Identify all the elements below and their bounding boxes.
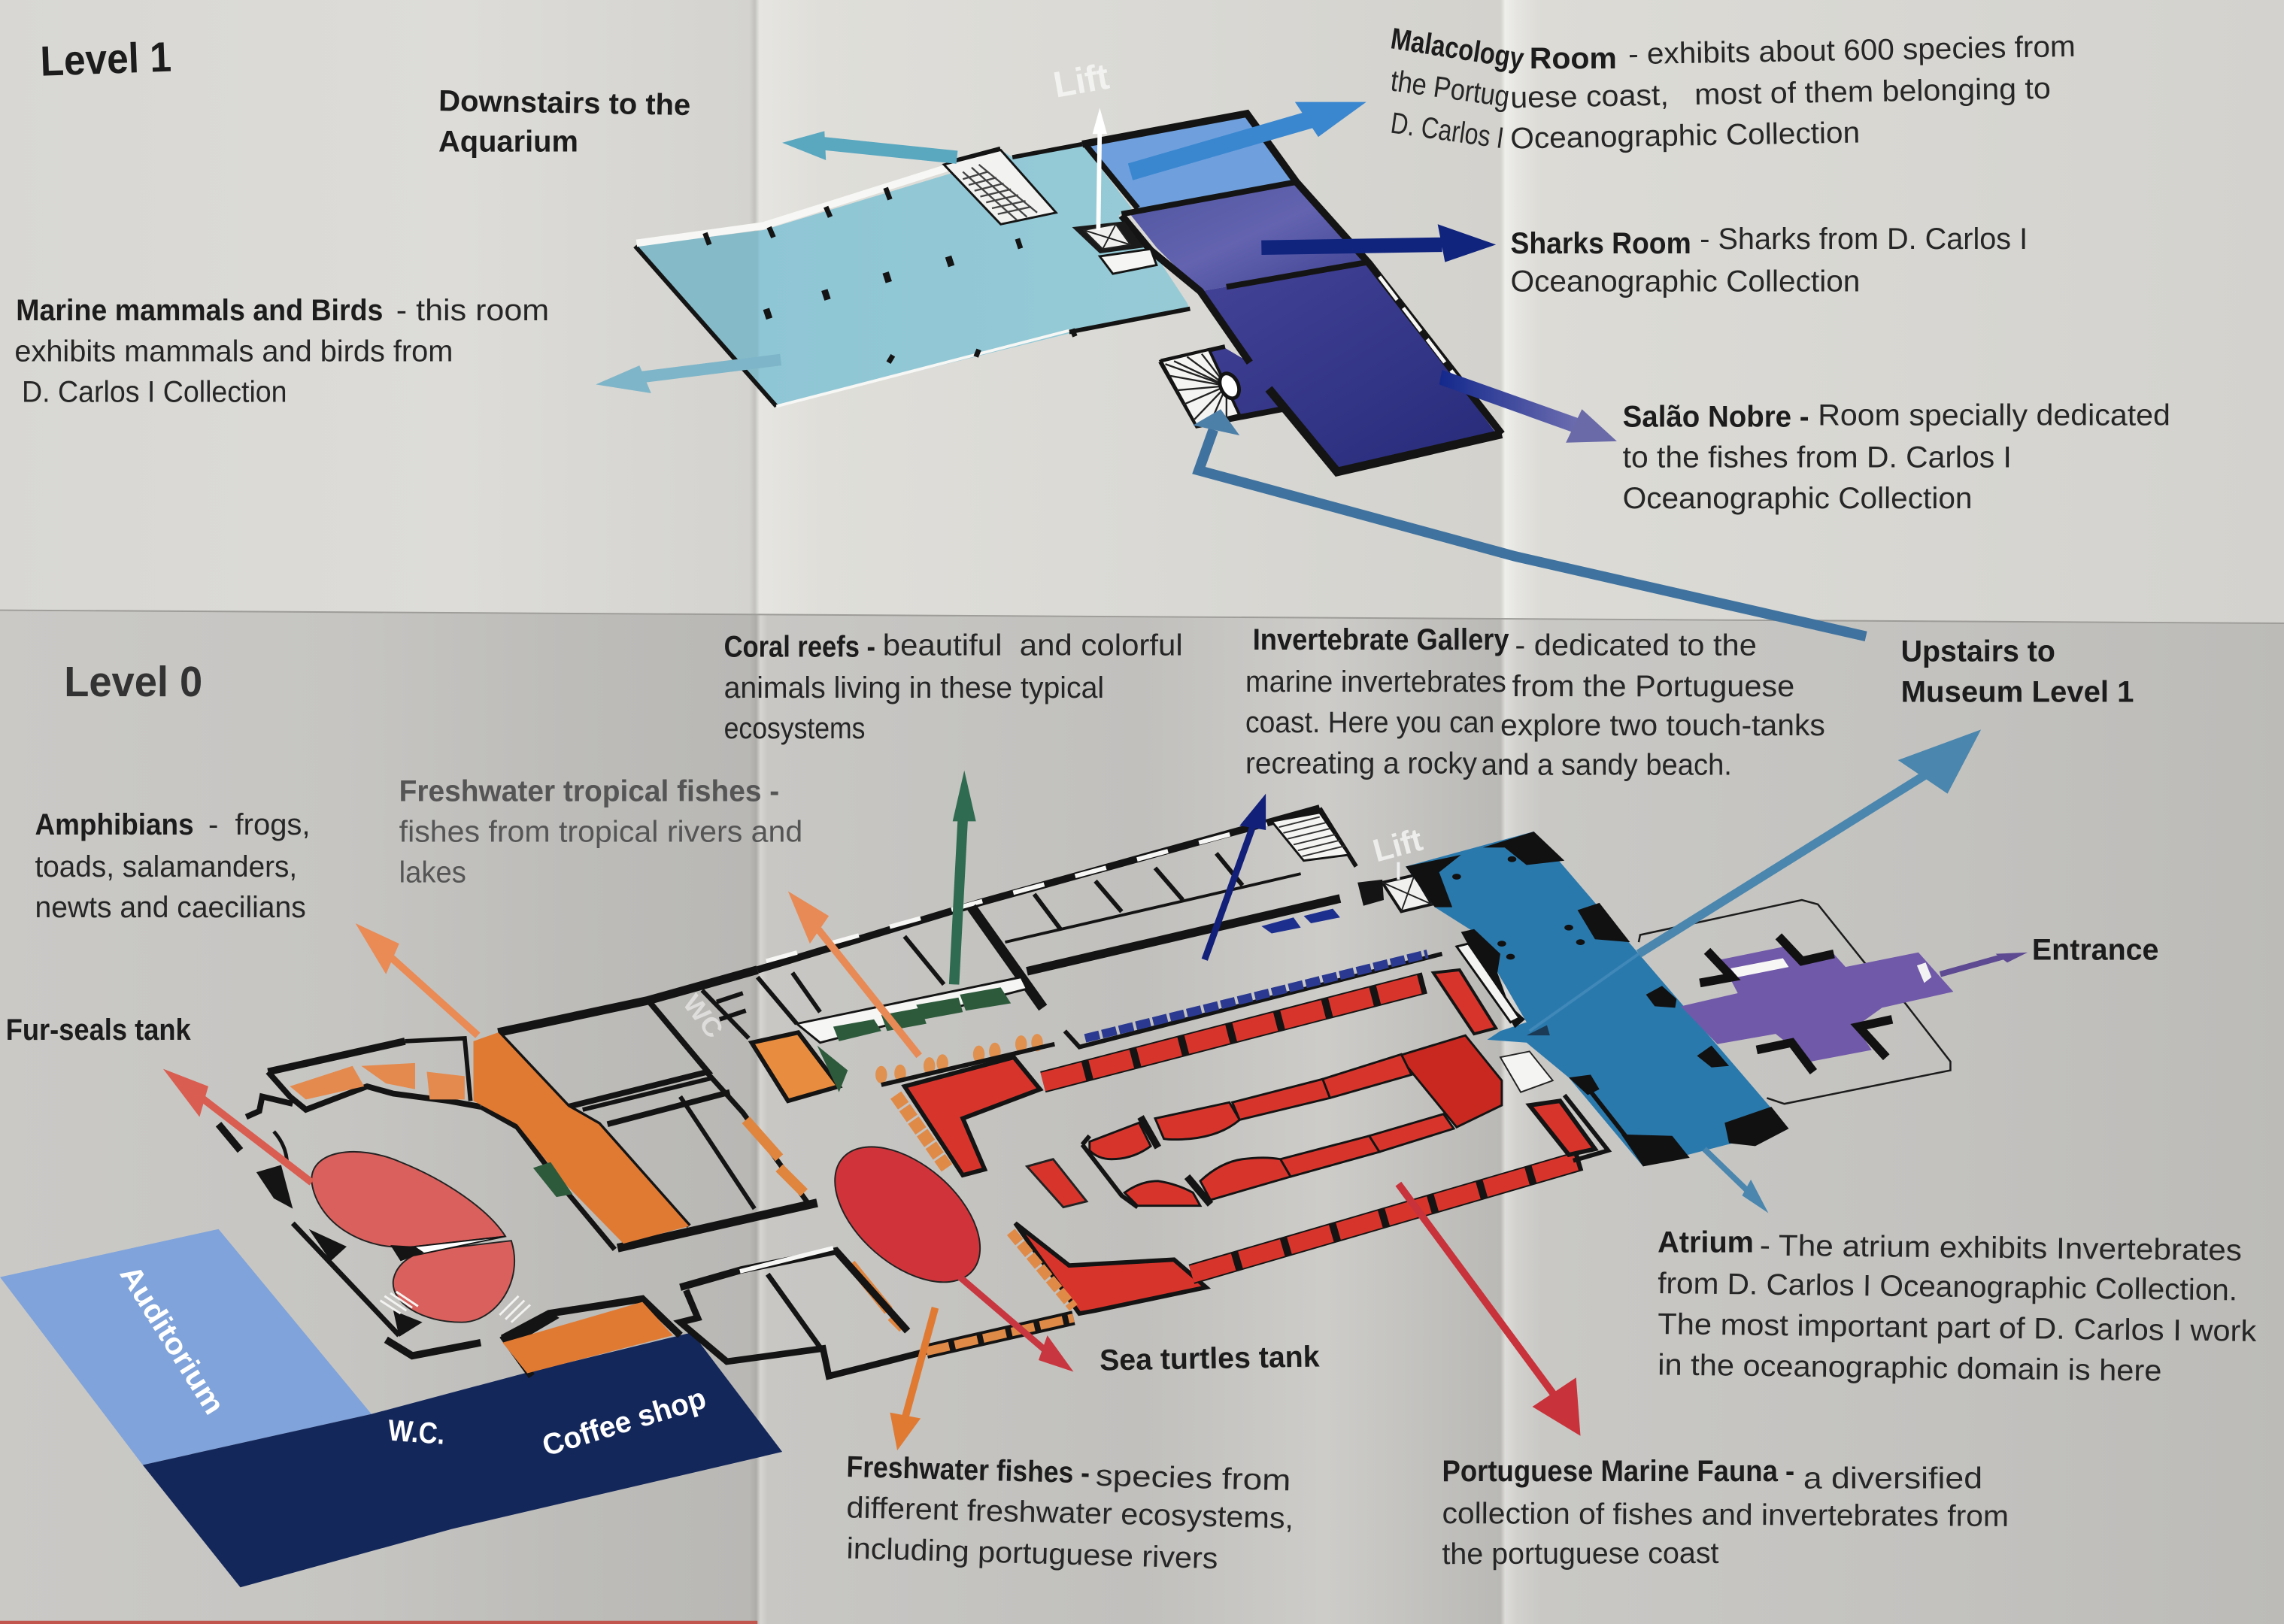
block: wc and coffee shop — [143, 1332, 782, 1587]
text: malacology room: the Portug — [1389, 64, 1512, 114]
level 1 floor plan — [635, 114, 1502, 472]
text: upstairs to museum level 1: Museum Level 1 — [1901, 676, 2134, 709]
text: downstairs to the aquarium: Aquarium — [438, 125, 578, 158]
text: atrium: Atrium — [1658, 1226, 1754, 1259]
fur seal tank bottom — [393, 1241, 514, 1323]
red isolated case — [1027, 1159, 1087, 1207]
red central block — [1398, 1035, 1502, 1127]
text: coral reefs: ecosystems — [724, 712, 865, 745]
orange rooms — [290, 1032, 839, 1373]
fur seal tank top — [311, 1152, 505, 1247]
WC block — [677, 970, 751, 1044]
text: malacology room: D. Carlos I — [1389, 107, 1506, 155]
arrow: salao nobre — [1439, 370, 1617, 443]
text: marine mammals and birds: exhibits mammals and birds from — [14, 335, 453, 368]
text: freshwater fishes: different freshwater ecosystems, — [846, 1491, 1294, 1535]
text: malacology room: Malacology — [1388, 22, 1526, 76]
tank stairs — [381, 1292, 530, 1323]
invertebrate gallery strip — [1065, 954, 1442, 1047]
text: coral reefs: animals living in these typical — [724, 671, 1104, 704]
block: auditorium — [0, 1229, 372, 1465]
text: amphibians: - frogs, — [208, 808, 311, 841]
windows — [636, 168, 1464, 406]
lift shaft — [1072, 221, 1157, 274]
text: sea turtles tank: Sea turtles tank — [1100, 1340, 1321, 1377]
text: marine mammals and birds: - this room — [396, 294, 549, 327]
text: entrance: Entrance — [2032, 933, 2158, 966]
text: fur-seals tank: Fur-seals tank — [6, 1013, 192, 1047]
text: downstairs to the aquarium — [438, 84, 691, 158]
west wing structure — [219, 970, 817, 1376]
green strip — [833, 987, 1011, 1041]
arrow: upstairs to level 1 — [1193, 409, 1866, 636]
text: upstairs to museum level 1: Upstairs to — [1901, 635, 2055, 668]
arrow: atrium — [1704, 1149, 1768, 1213]
arrow: amphibians — [356, 923, 478, 1035]
red section west — [905, 1057, 1040, 1175]
arrow: freshwater fishes — [890, 1307, 935, 1450]
text: invertebrate gallery: and a sandy beach. — [1482, 748, 1732, 781]
orange bumps — [875, 1034, 1054, 1085]
room: sharks — [1129, 182, 1368, 291]
text: freshwater tropical fishes: Freshwater tropical fishes - — [399, 774, 779, 807]
text: portuguese marine fauna: collection of fishes and invertebrates from — [1442, 1497, 2009, 1533]
block: auditorium: Auditorium — [114, 1259, 231, 1420]
lift level 0 — [1357, 862, 1432, 911]
text: freshwater fishes: including portuguese rivers — [846, 1532, 1218, 1575]
room: marine mammals and birds — [635, 144, 1190, 406]
text: salao nobre: Oceanographic Collection — [1623, 482, 1973, 515]
red block south east — [1530, 1095, 1608, 1161]
text: portuguese marine fauna: Portuguese Marine Fauna - — [1442, 1455, 1794, 1488]
entrance hall — [1639, 900, 1953, 1104]
blue wall cases — [1261, 909, 1340, 934]
text: portuguese marine fauna: the portuguese coast — [1442, 1537, 1719, 1571]
red gallery south row — [1191, 1161, 1580, 1274]
block: wc and coffee shop: Coffee shop — [538, 1382, 710, 1462]
block: wc and coffee shop: W.C. — [387, 1414, 446, 1451]
text: freshwater tropical fishes — [399, 774, 802, 889]
arrow: tropical freshwater fishes — [788, 891, 919, 1056]
text: salao nobre — [1623, 399, 2170, 515]
arrow: sharks — [1261, 224, 1496, 262]
text: invertebrate gallery — [1245, 623, 1825, 781]
text: coral reefs — [724, 629, 1183, 745]
text: atrium — [1658, 1226, 2257, 1388]
text: marine mammals and birds: D. Carlos I Collection — [22, 376, 287, 409]
WC block: WC — [677, 989, 729, 1044]
tank wedges — [256, 1165, 560, 1347]
text: sharks room: Oceanographic Collection — [1511, 265, 1860, 298]
text: malacology room — [1388, 22, 2076, 156]
arrow: sea turtles — [960, 1277, 1073, 1372]
text: portuguese marine fauna: a diversified — [1803, 1462, 1982, 1495]
arrow: upstairs — [1527, 729, 1981, 1035]
red block east — [1433, 970, 1496, 1034]
arrow: malacology — [1130, 102, 1366, 172]
text: invertebrate gallery: recreating a rocky — [1245, 747, 1477, 780]
text: malacology room: Room — [1530, 42, 1617, 75]
atrium — [1406, 832, 1788, 1166]
text: invertebrate gallery: Invertebrate Gallery — [1253, 623, 1509, 656]
text: freshwater fishes: species from — [1095, 1459, 1291, 1497]
text: upstairs to museum level 1 — [1901, 635, 2134, 709]
text: amphibians: newts and caecilians — [35, 891, 306, 924]
text: salao nobre: Room specially dedicated — [1818, 399, 2170, 432]
text: atrium: from D. Carlos I Oceanographic Collection. — [1658, 1267, 2237, 1307]
red south block — [1011, 1223, 1206, 1313]
text: sharks room: Sharks Room — [1511, 227, 1691, 260]
text: invertebrate gallery: from the Portuguese — [1512, 670, 1794, 703]
arrow: entrance — [1940, 953, 2028, 974]
staircase to aquarium — [944, 150, 1056, 224]
text: atrium: in the oceanographic domain is here — [1658, 1348, 2162, 1388]
heading: Level 0: Level 0 — [64, 658, 202, 705]
text: freshwater tropical fishes: lakes — [399, 856, 466, 889]
text: freshwater fishes — [846, 1450, 1294, 1575]
north wall — [757, 808, 1320, 970]
arrow: to aquarium — [782, 131, 957, 160]
room: salao nobre — [1161, 262, 1499, 472]
text: malacology room: - exhibits about 600 species from — [1628, 30, 2076, 71]
text: invertebrate gallery: - dedicated to the — [1515, 629, 1757, 662]
text: invertebrate gallery: explore two touch-tanks — [1500, 709, 1825, 742]
tank divider — [415, 1236, 505, 1256]
south rooms — [681, 1251, 927, 1376]
arrow: marine mammals — [596, 359, 781, 393]
north rooms walls — [757, 808, 1356, 1024]
atrium side stairs — [1500, 1051, 1553, 1092]
sea turtle tank — [810, 1121, 1005, 1308]
text: malacology room: uese coast, most of them belonging to — [1510, 72, 2051, 114]
text: atrium: The most important part of D. Carlos I work — [1658, 1307, 2257, 1348]
arrow: coral reefs — [953, 771, 976, 984]
text: amphibians: toads, salamanders, — [35, 850, 297, 883]
text: portuguese marine fauna — [1442, 1455, 2009, 1571]
heading: Level 1: Level 1 — [39, 33, 172, 85]
arrow: fur seals — [163, 1069, 311, 1183]
text: marine mammals and birds: Marine mammals and Birds — [16, 294, 383, 327]
arrow: lift level 1 — [1093, 108, 1107, 230]
red gallery north row — [1043, 983, 1424, 1082]
text: amphibians: Amphibians — [35, 808, 194, 841]
inner dividers — [1082, 1117, 1211, 1207]
text: invertebrate gallery: coast. Here you can — [1245, 706, 1494, 739]
north stairs — [1272, 813, 1349, 861]
orange strips — [746, 1120, 903, 1328]
arrow: portuguese marine fauna — [1398, 1184, 1580, 1436]
level 0 floor plan — [219, 808, 1953, 1376]
text: coral reefs: beautiful and colorful — [883, 629, 1183, 662]
white corridor — [796, 977, 1027, 1043]
green niches — [533, 1046, 848, 1197]
text: coral reefs: Coral reefs - — [724, 631, 875, 664]
room: malacology — [1085, 114, 1297, 208]
text: sharks room — [1511, 223, 2028, 298]
text: salao nobre: to the fishes from D. Carlos I — [1623, 441, 2012, 474]
label: Lift level 0: Lift — [1369, 822, 1427, 869]
text: amphibians — [35, 808, 311, 924]
window strip south — [740, 1248, 833, 1271]
text: invertebrate gallery: marine invertebrates — [1245, 665, 1506, 698]
columns — [763, 238, 1023, 320]
text: downstairs to the aquarium: Downstairs to the — [438, 84, 691, 122]
label: Lift level 1: Lift — [1051, 56, 1112, 106]
text: salao nobre: Salão Nobre - — [1623, 401, 1809, 434]
orange tiles — [896, 1095, 947, 1168]
level 1 walls — [635, 114, 1502, 472]
text: sharks room: - Sharks from D. Carlos I — [1700, 223, 2028, 256]
orange south row — [927, 1318, 1073, 1351]
orange corridor — [473, 1032, 689, 1244]
text: freshwater tropical fishes: fishes from tropical rivers and — [399, 816, 802, 849]
arrow: invertebrate gallery — [1205, 794, 1266, 959]
spiral staircase — [1161, 350, 1243, 426]
red inner rooms — [1090, 1054, 1454, 1206]
text: freshwater fishes: Freshwater fishes - — [846, 1450, 1090, 1489]
text: atrium: - The atrium exhibits Invertebrates — [1760, 1229, 2242, 1267]
text: malacology room: Oceanographic Collection — [1510, 116, 1860, 156]
text: marine mammals and birds — [14, 294, 549, 409]
